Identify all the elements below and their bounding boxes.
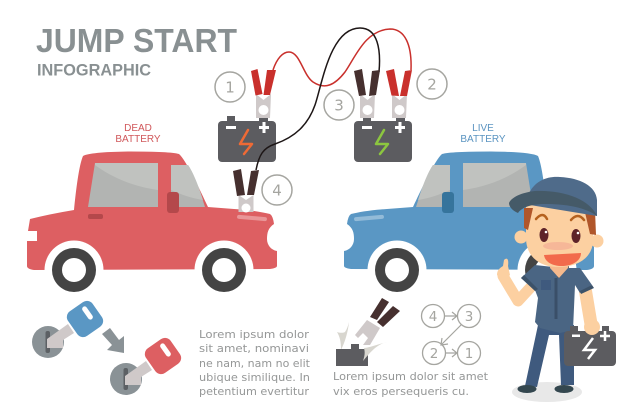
step number 2 [417,69,447,99]
step number 3 [324,90,354,120]
face [526,205,593,267]
left arm raised [503,276,530,301]
clamp 2 [386,69,412,118]
icon: red key [110,335,184,395]
hand on battery [584,319,600,335]
text block: key instructions: ne nam, nam no elit [199,357,311,370]
icon: down arrow [102,328,124,353]
shoes [518,385,574,393]
clamp 3 [354,69,380,118]
label: live battery: LIVE [472,123,494,134]
nose [543,242,573,250]
eyes [540,228,580,243]
step number 4 [262,175,292,205]
text block: cable removal: Lorem ipsum dolor sit amet [333,370,489,383]
step number 1 [215,72,245,102]
mechanic [497,177,616,402]
step number 3: 3 [334,96,344,114]
removal order diagram: 4 [429,309,437,325]
text block: key instructions: ubique similique. In [199,371,310,384]
text block: key instructions: petentium evertitur [199,385,309,398]
text block: cable removal: vix eros persequeris cu. [333,385,469,398]
label: dead battery: DEAD [124,123,152,134]
eyebrows [536,215,584,220]
sleeve cuffs [521,275,594,294]
cap [528,177,597,216]
hair [524,208,596,235]
thumb [497,259,510,282]
title: JUMP START [36,23,238,60]
torso and sleeves [521,265,592,333]
step number 2: 2 [427,76,437,94]
clamp 4 [233,169,259,212]
battery: live [354,116,412,162]
text block: key instructions [199,328,311,398]
label: dead battery: BATTERY [115,134,161,145]
shadow [512,382,582,402]
legs [525,325,574,387]
removal order diagram: 3 [465,309,473,325]
battery: dead [218,116,276,162]
icon: sparking clamp on battery [336,298,400,366]
removal order diagram: 1 [465,346,473,362]
step number 1: 1 [225,78,235,96]
pocket and placket [541,280,551,290]
removal order diagram [422,304,480,364]
ears [514,230,604,248]
red cable [273,29,411,86]
handheld battery [564,326,616,366]
text block: key instructions: Lorem ipsum dolor [199,328,310,341]
mouth [544,253,581,266]
icon: blue key [32,298,106,358]
removal order diagram: 2 [430,346,438,362]
car: dead battery [20,152,285,302]
black cable [256,28,380,170]
text block: key instructions: sit amet, nominavi [199,342,309,355]
label: live battery: BATTERY [460,134,506,145]
cap brim [509,191,597,216]
neck [550,262,568,278]
car: live battery [336,152,601,302]
step number 4: 4 [272,182,282,200]
subtitle: INFOGRAPHIC [37,60,151,80]
right arm [585,288,591,324]
text block: cable removal [333,370,489,398]
clamp 1 [251,69,276,118]
